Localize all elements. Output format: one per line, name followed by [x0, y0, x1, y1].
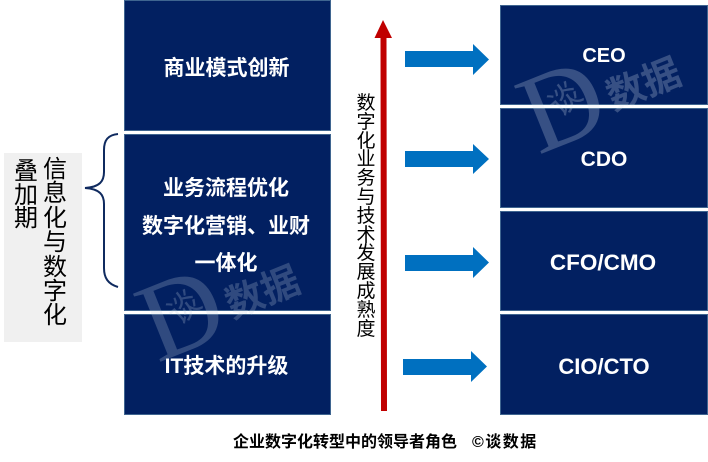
- watermark: 谈数据 lower left: 谈: [155, 278, 210, 334]
- panel: 商业模式创新: [124, 0, 331, 131]
- watermark: 谈数据 upper right: 数据: [597, 42, 688, 121]
- panel: CDO: [500, 108, 708, 208]
- watermark: 谈数据 upper right: D: [501, 33, 623, 178]
- panel: CFO/CMO: CFO/CMO: [550, 250, 656, 275]
- caption: 企业数字化转型中的领导者角色: [233, 434, 457, 451]
- panel: CDO: CDO: [581, 148, 627, 171]
- panel: CEO: [500, 5, 708, 105]
- panel: IT技术的升级: [124, 314, 331, 415]
- panel: CFO/CMO: [500, 211, 708, 311]
- panel: CIO/CTO: CIO/CTO: [558, 354, 650, 379]
- panel: left label background: [4, 153, 82, 342]
- panel: 商业模式创新: 商业模式创新: [164, 56, 290, 80]
- watermark: 谈数据 lower left: 数据: [216, 250, 307, 329]
- watermark: 谈数据 lower left: D: [120, 241, 242, 386]
- text: 信息化与数字化: 信息化与数字化: [43, 149, 67, 330]
- panel: 业务流程优化: [124, 134, 331, 311]
- watermark: 谈数据 upper right: 谈: [536, 70, 591, 126]
- panel: CEO: CEO: [582, 44, 626, 66]
- panel: 业务流程优化: 数字化营销、业财: [142, 215, 310, 238]
- panel: 业务流程优化: 一体化: [194, 252, 258, 275]
- text: 数字化业务与技术发展成熟度: 数字化业务与技术发展成熟度: [356, 88, 376, 341]
- text: 叠加期: 叠加期: [14, 151, 38, 233]
- caption: [233, 433, 538, 451]
- panel: CIO/CTO: [500, 314, 708, 415]
- caption: ©谈数据: [472, 434, 538, 451]
- panel: IT技术的升级: IT技术的升级: [165, 354, 288, 378]
- panel: 业务流程优化: 业务流程优化: [163, 177, 289, 200]
